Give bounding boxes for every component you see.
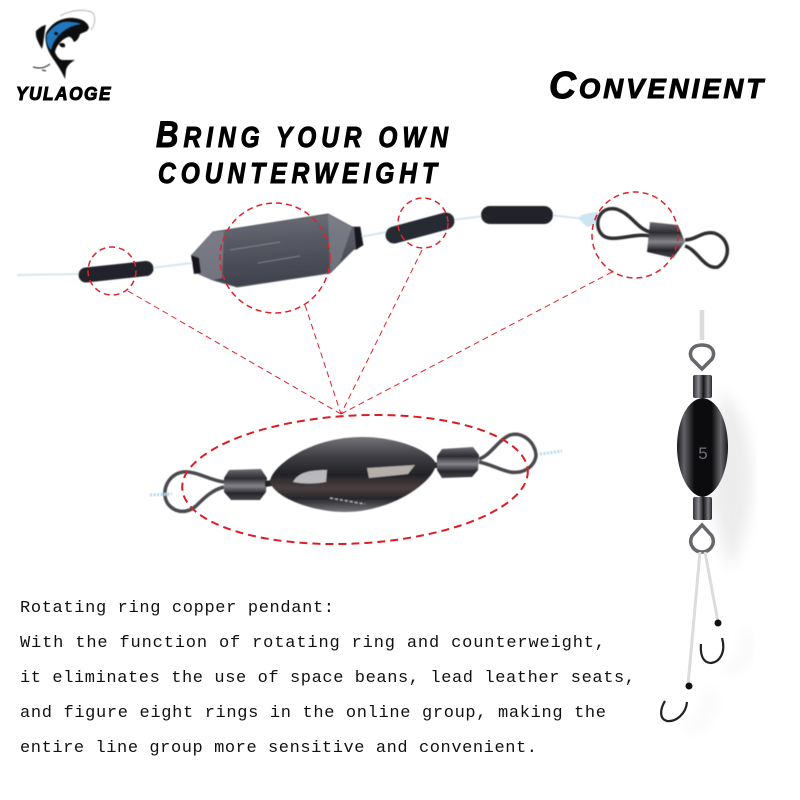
- number on pendant: 5: [698, 444, 708, 463]
- callout circle: middle sleeve: [398, 198, 448, 248]
- line ends: [150, 451, 562, 495]
- description text: With the function of rotating ring and counterweight,: [20, 634, 605, 653]
- connector lines to pendant: [128, 250, 612, 414]
- rubber sleeve middle: [394, 221, 446, 235]
- heading: Bring your own counterweight: [156, 114, 453, 190]
- shadow: [710, 390, 752, 570]
- top line and knot: [700, 310, 704, 340]
- right eye ring: [479, 434, 536, 472]
- bottom barrel: [693, 497, 712, 520]
- bottom eye ring: [691, 525, 713, 552]
- description text: entire line group more sensitive and convenient.: [20, 739, 537, 758]
- pendant neck: [265, 462, 439, 487]
- upper hook: [701, 638, 723, 663]
- pendant highlights: [293, 470, 327, 484]
- hook shadows: [685, 630, 748, 728]
- description text: it eliminates the use of space beans, lead leather seats,: [20, 669, 635, 688]
- left eye ring: [165, 472, 224, 511]
- callout circle: swivel: [592, 192, 678, 278]
- fishing line: [17, 215, 585, 275]
- callout circle: left sleeve: [88, 247, 136, 295]
- rubber sleeve right: [490, 206, 544, 224]
- heading: Bring your own counterweight: BRING YOUR OWN: [156, 114, 453, 155]
- logo: YULAOGE fish: [16, 10, 112, 104]
- lower hook: [661, 701, 687, 721]
- callout circle: lead weight: [220, 203, 330, 313]
- black oval body: [677, 398, 728, 497]
- heading: Bring your own counterweight: COUNTERWEIGHT: [158, 158, 442, 190]
- top barrel: [693, 375, 712, 398]
- description text: [20, 599, 635, 758]
- logo wordmark: YULAOGE: [16, 84, 112, 104]
- pendant oval body: [270, 437, 436, 512]
- copper pendant with swivels: [150, 434, 562, 512]
- description text: and figure eight rings in the online group, making the: [20, 704, 606, 723]
- red dashed callouts: [88, 192, 678, 414]
- icon: leaping fish: [33, 10, 95, 79]
- rubber sleeve left: [86, 268, 146, 275]
- fishing rig photo: upper line: [17, 209, 727, 287]
- swivel: [598, 209, 727, 267]
- vertical rig: black pendant with hooks: [661, 310, 752, 728]
- leader lines: [688, 552, 718, 685]
- left barrel: [224, 469, 267, 500]
- heading: Convenient: CONVENIENT: [549, 65, 766, 107]
- hook beads: [714, 620, 722, 626]
- callout ellipse: pendant: [179, 407, 531, 552]
- line knot: [578, 211, 598, 227]
- top eye ring: [690, 345, 714, 369]
- description text: Rotating ring copper pendant:: [20, 599, 334, 618]
- right barrel: [437, 447, 479, 478]
- lead weight: [191, 214, 363, 287]
